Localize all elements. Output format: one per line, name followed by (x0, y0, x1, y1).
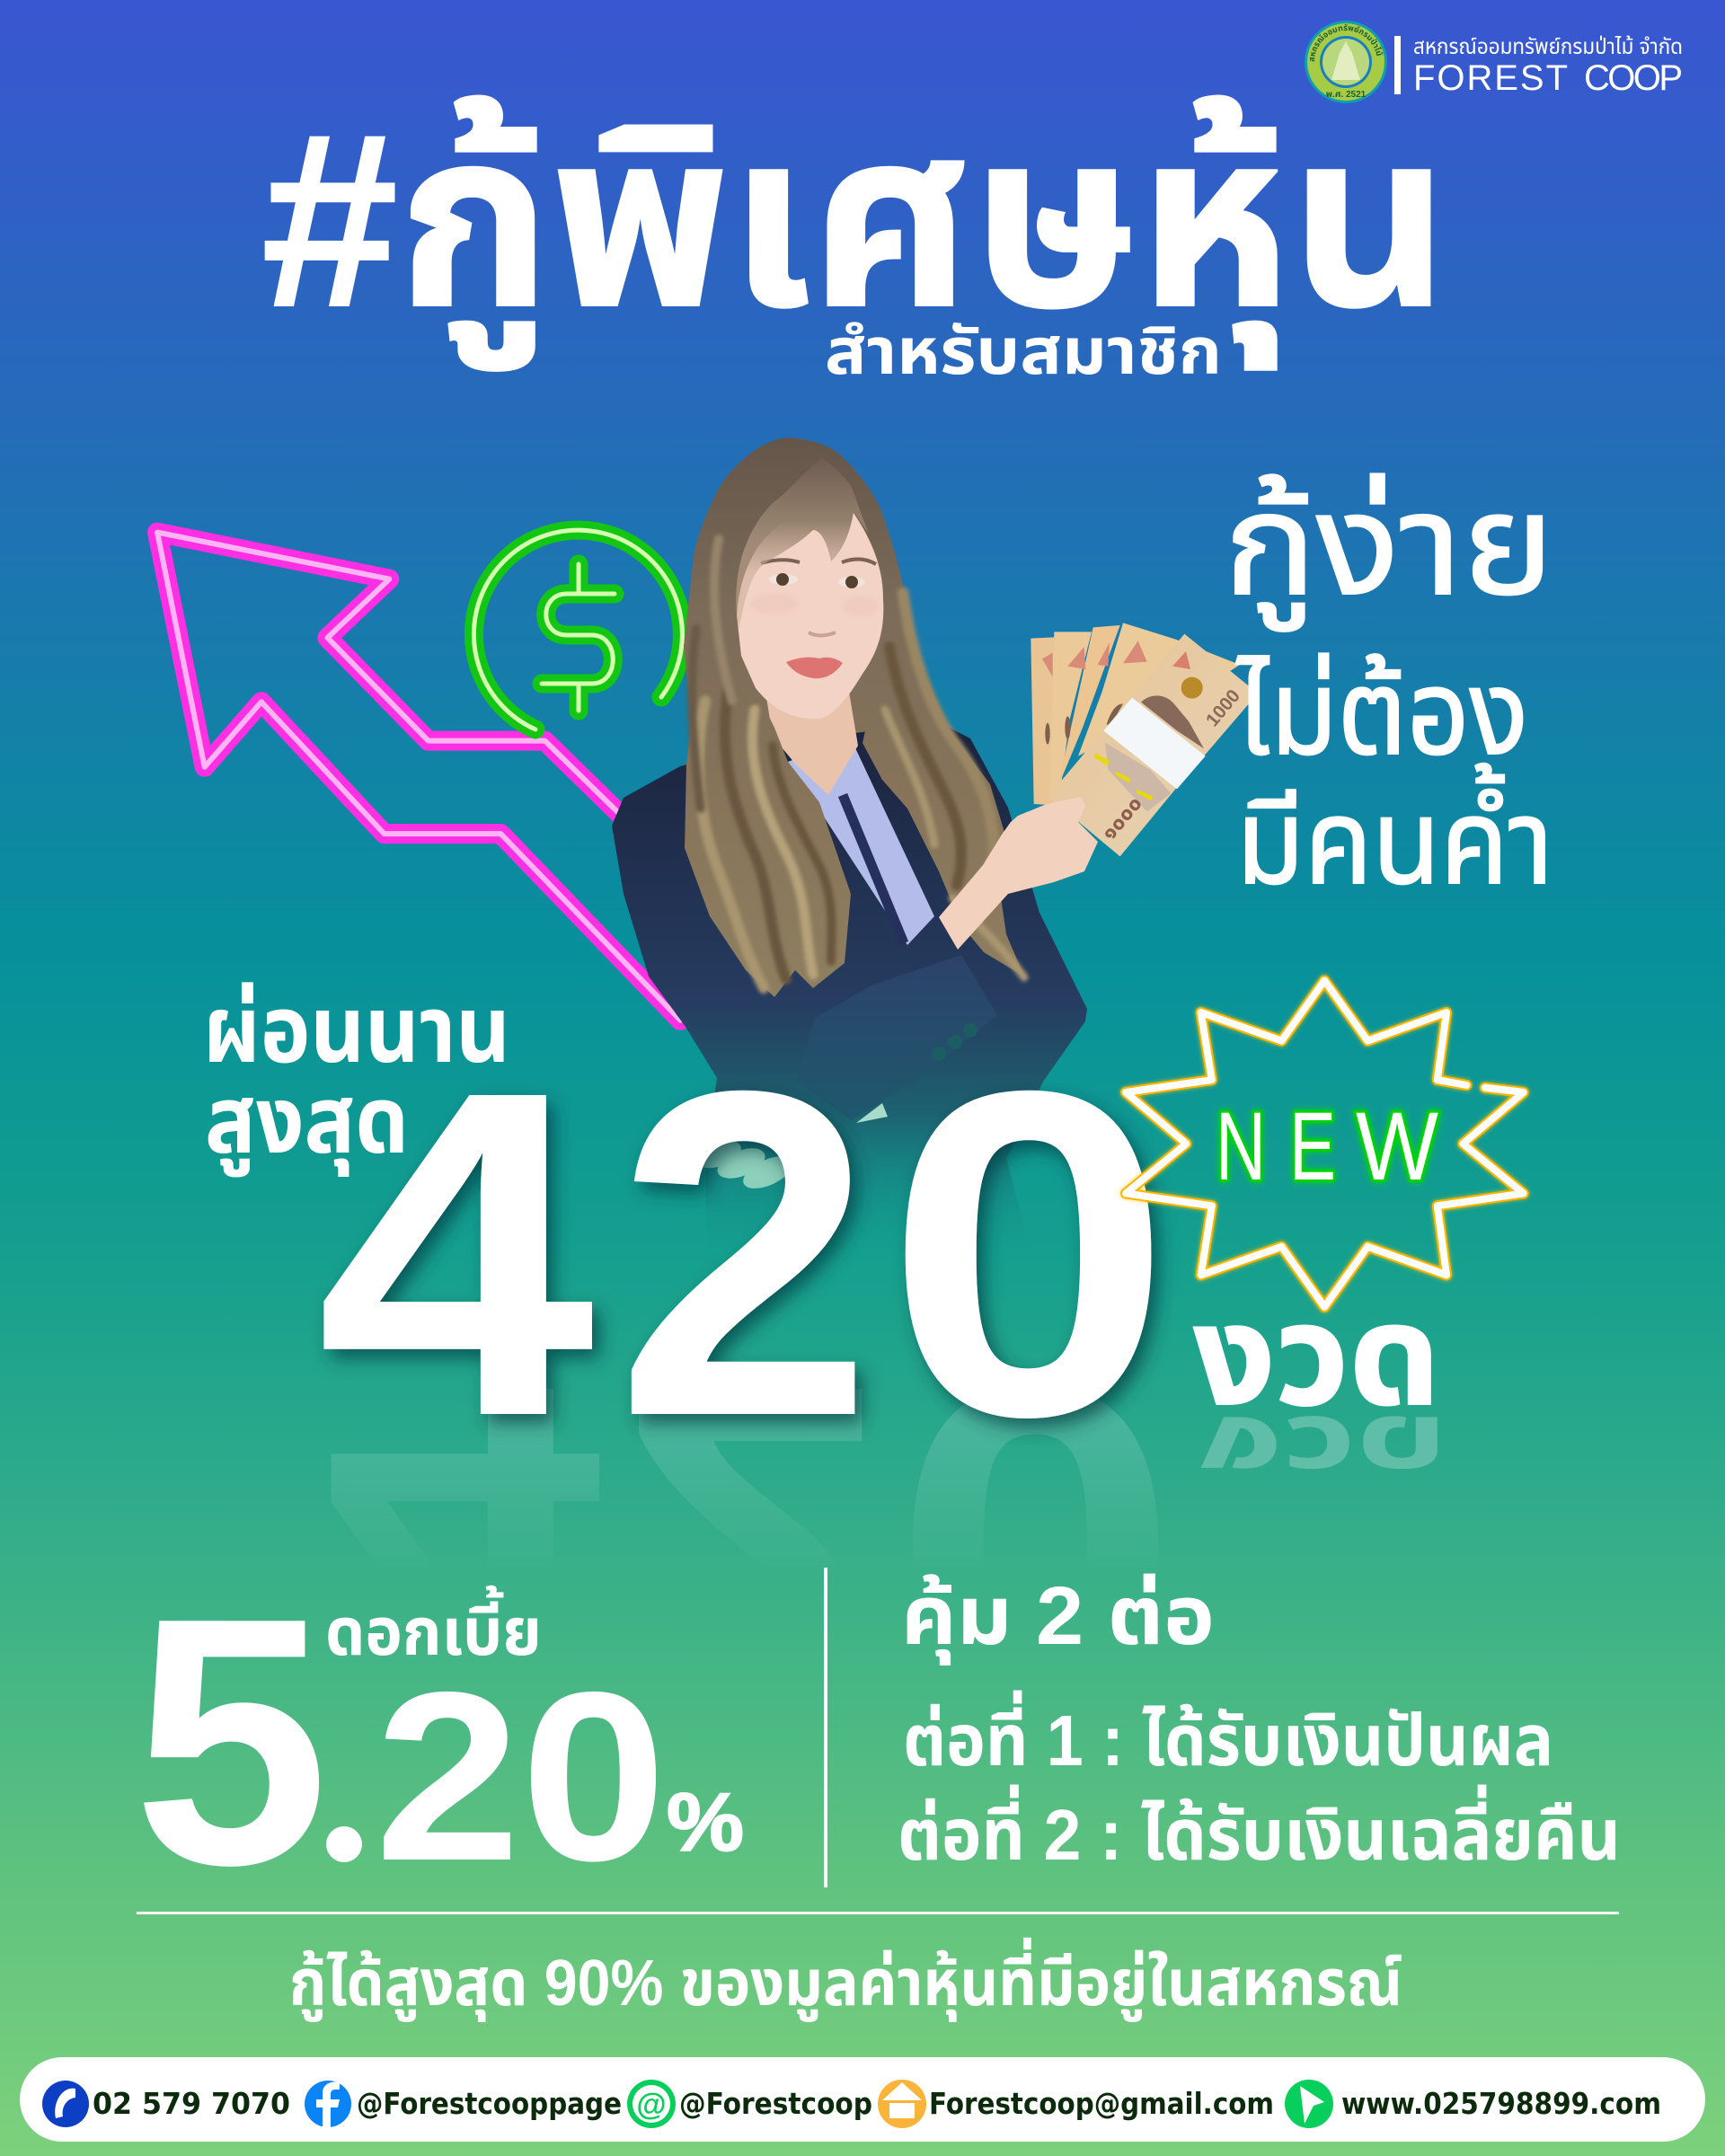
phone number: 02 579 7070 (93, 2086, 290, 2121)
email address: Forestcoop@gmail.com (929, 2086, 1274, 2121)
hair back (684, 437, 919, 755)
text: repayment up to: ผ่อนนาน (203, 978, 510, 1082)
icon: neon dollar (473, 530, 682, 729)
neon word NEW: E (1289, 1091, 1336, 1200)
icon: facebook (305, 2081, 351, 2127)
hair left mass (684, 449, 851, 997)
icon: cooperative seal: พ.ศ. 2521 (1326, 90, 1367, 100)
horizontal divider (137, 1912, 1619, 1914)
jacket (612, 720, 1087, 1249)
sleeve buttons (932, 1023, 978, 1061)
icon: neon arrow (157, 533, 680, 1021)
logo: Forest Coop (1305, 21, 1683, 103)
eyes (761, 559, 876, 588)
line handle: @Forestcoop (679, 2086, 872, 2121)
icon: website cursor (1285, 2080, 1333, 2128)
face (737, 500, 883, 719)
benefit 1: ต่อที่ 1 : ได้รับเงินปันผล (903, 1691, 1553, 1780)
reflection of 420: 2 (623, 1290, 880, 1807)
rate point (326, 1826, 362, 1862)
text: loan limit: กู้ได้สูงสุด 90% ของมูลค่าหุ้นที่มีอยู่ในสหกรณ์ (289, 1938, 1402, 2022)
text: maximum: สูงสุด (205, 1069, 409, 1177)
benefit 2: ต่อที่ 2 : ได้รับเงินเฉลี่ยคืน (898, 1785, 1621, 1875)
neon word NEW (1216, 1091, 1438, 1200)
number: 420: 4 (316, 995, 598, 1513)
rate percent: % (667, 1777, 744, 1869)
rate 20: 20 (375, 1641, 667, 1911)
hair strands (692, 539, 1024, 988)
title: #กู้พิเศษหุ้น (261, 83, 1449, 371)
neck (765, 692, 858, 795)
label: interest: ดอกเบี้ย (325, 1586, 542, 1669)
photo: woman holding banknotes (612, 437, 1251, 1249)
number: 420: 2 (615, 995, 873, 1513)
facebook handle: @Forestcooppage (357, 2086, 622, 2121)
icon: line (627, 2080, 676, 2128)
subtitle: สำหรับสมาชิก (825, 316, 1222, 388)
hand (939, 797, 1098, 950)
front note (1048, 634, 1251, 856)
bangs (736, 458, 891, 629)
hair right mass (845, 467, 1024, 976)
lower hand seen through digit (693, 1135, 798, 1195)
banknotes: 1000 (1202, 685, 1244, 730)
text: easy to borrow: กู้ง่าย (1224, 466, 1554, 632)
rate 5: 5 (133, 1545, 329, 1939)
icon: cooperative seal: สหกรณ์ออมทรัพย์กรมป่าไม้ (1310, 23, 1384, 61)
shirt (788, 738, 934, 945)
number: 420: 0 (885, 995, 1172, 1513)
number: 420 (316, 995, 1172, 1513)
banknotes: ๑๐๐๐ (1097, 791, 1147, 845)
neon word NEW: W (1356, 1091, 1438, 1200)
text: installments: งวด (1193, 1278, 1440, 1435)
icon: line: @ (636, 2088, 667, 2122)
neon star (1126, 980, 1524, 1307)
banknotes (1031, 623, 1251, 856)
website: www.025798899.com (1341, 2086, 1661, 2121)
sleeve (797, 955, 997, 1120)
text: no guarantor line 1: ไม่ต้อง (1235, 647, 1528, 779)
contact bar (20, 2057, 1705, 2142)
text: no guarantor line 2: มีคนค้ำ (1236, 763, 1553, 908)
logo English name (1413, 58, 1683, 98)
double benefit (898, 1570, 1621, 1875)
nose (809, 632, 836, 636)
badge: neon NEW star (1126, 980, 1524, 1307)
logo English name: COOP (1584, 58, 1683, 98)
reflection of 420: 4 (323, 1290, 606, 1807)
icon: phone (42, 2081, 89, 2127)
logo Thai name: สหกรณ์ออมทรัพย์กรมป่าไม้ จำกัด (1413, 35, 1683, 59)
reflection of 420: 0 (892, 1290, 1180, 1807)
neon word NEW: N (1216, 1091, 1266, 1200)
interest rate (133, 1545, 744, 1939)
cheek blush (751, 593, 879, 616)
reflection of 420 (331, 1389, 1158, 1534)
icon: email (878, 2080, 926, 2128)
reflection of installments: งวด (1200, 1397, 1447, 1500)
lips (786, 658, 843, 678)
vertical divider (824, 1568, 827, 1887)
benefit heading: คุ้ม 2 ต่อ (901, 1570, 1215, 1666)
shirt stripe (843, 795, 904, 943)
shirt cuff (856, 1103, 888, 1123)
icon: cooperative seal (1305, 21, 1387, 103)
logo English name: FOREST (1413, 58, 1568, 98)
